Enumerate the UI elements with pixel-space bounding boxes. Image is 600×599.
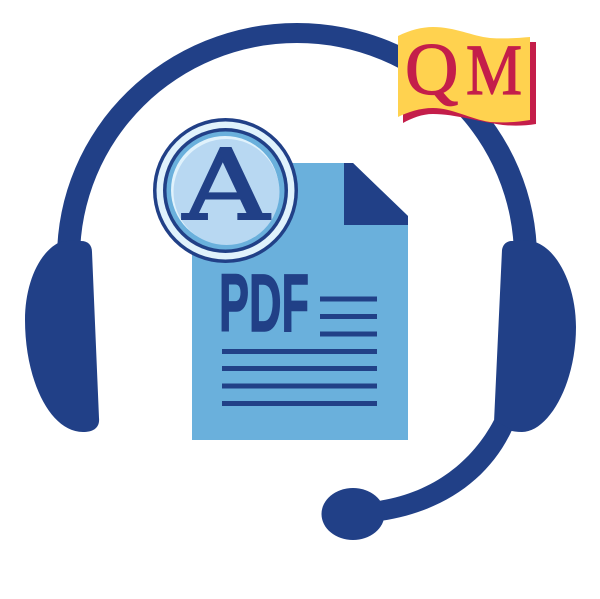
badge rings [153, 118, 298, 263]
flag body [398, 27, 530, 122]
right ear cup [494, 241, 576, 432]
document page [192, 163, 408, 440]
folded corner [344, 163, 408, 225]
PDF document [192, 163, 408, 440]
QM flag logo [398, 27, 536, 126]
headband [57, 23, 537, 258]
headset [25, 23, 576, 540]
microphone boom [378, 420, 512, 521]
letter M: M [466, 30, 522, 110]
flag shadow [403, 42, 536, 126]
letter A: A [182, 129, 270, 242]
text lines [222, 296, 377, 406]
left ear cup [25, 241, 99, 432]
letter Q: Q [405, 29, 458, 111]
PDF label: PDF [219, 258, 309, 349]
accessibility badge [153, 118, 298, 263]
microphone head [322, 488, 384, 540]
